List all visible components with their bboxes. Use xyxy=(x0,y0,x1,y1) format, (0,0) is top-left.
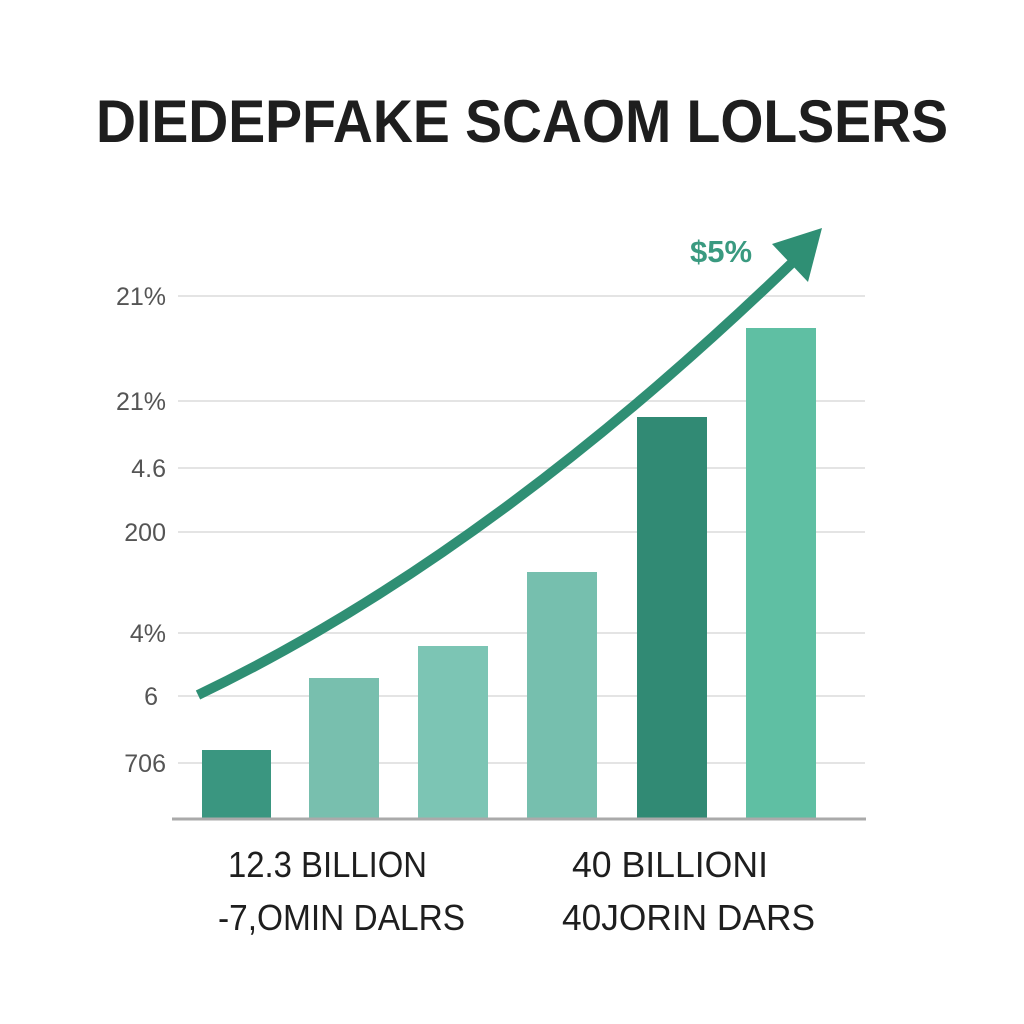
y-axis labels: 4.6 xyxy=(131,455,166,483)
title: DIEDEPFAKE SCAOM LOLSERS xyxy=(96,88,948,155)
y-axis labels xyxy=(116,283,166,778)
y-axis labels: 200 xyxy=(124,519,166,547)
bottom right label xyxy=(562,844,815,938)
bottom right label: 40JORIN DARS xyxy=(562,897,815,938)
trend arrow xyxy=(198,228,822,695)
y-axis labels: 6 xyxy=(144,683,158,711)
y-axis labels: 21% xyxy=(116,283,166,311)
arrow label: $5% xyxy=(690,234,752,269)
bottom left label: 12.3 BILLION xyxy=(228,844,427,885)
y-axis labels: 4% xyxy=(130,620,166,648)
y-axis labels: 706 xyxy=(124,750,166,778)
bottom right label: 40 BILLIONI xyxy=(572,844,768,885)
bottom left label: -7,OMIN DALRS xyxy=(218,897,465,938)
y-axis labels: 21% xyxy=(116,388,166,416)
bar chart xyxy=(202,328,816,818)
bottom left label xyxy=(218,844,465,938)
